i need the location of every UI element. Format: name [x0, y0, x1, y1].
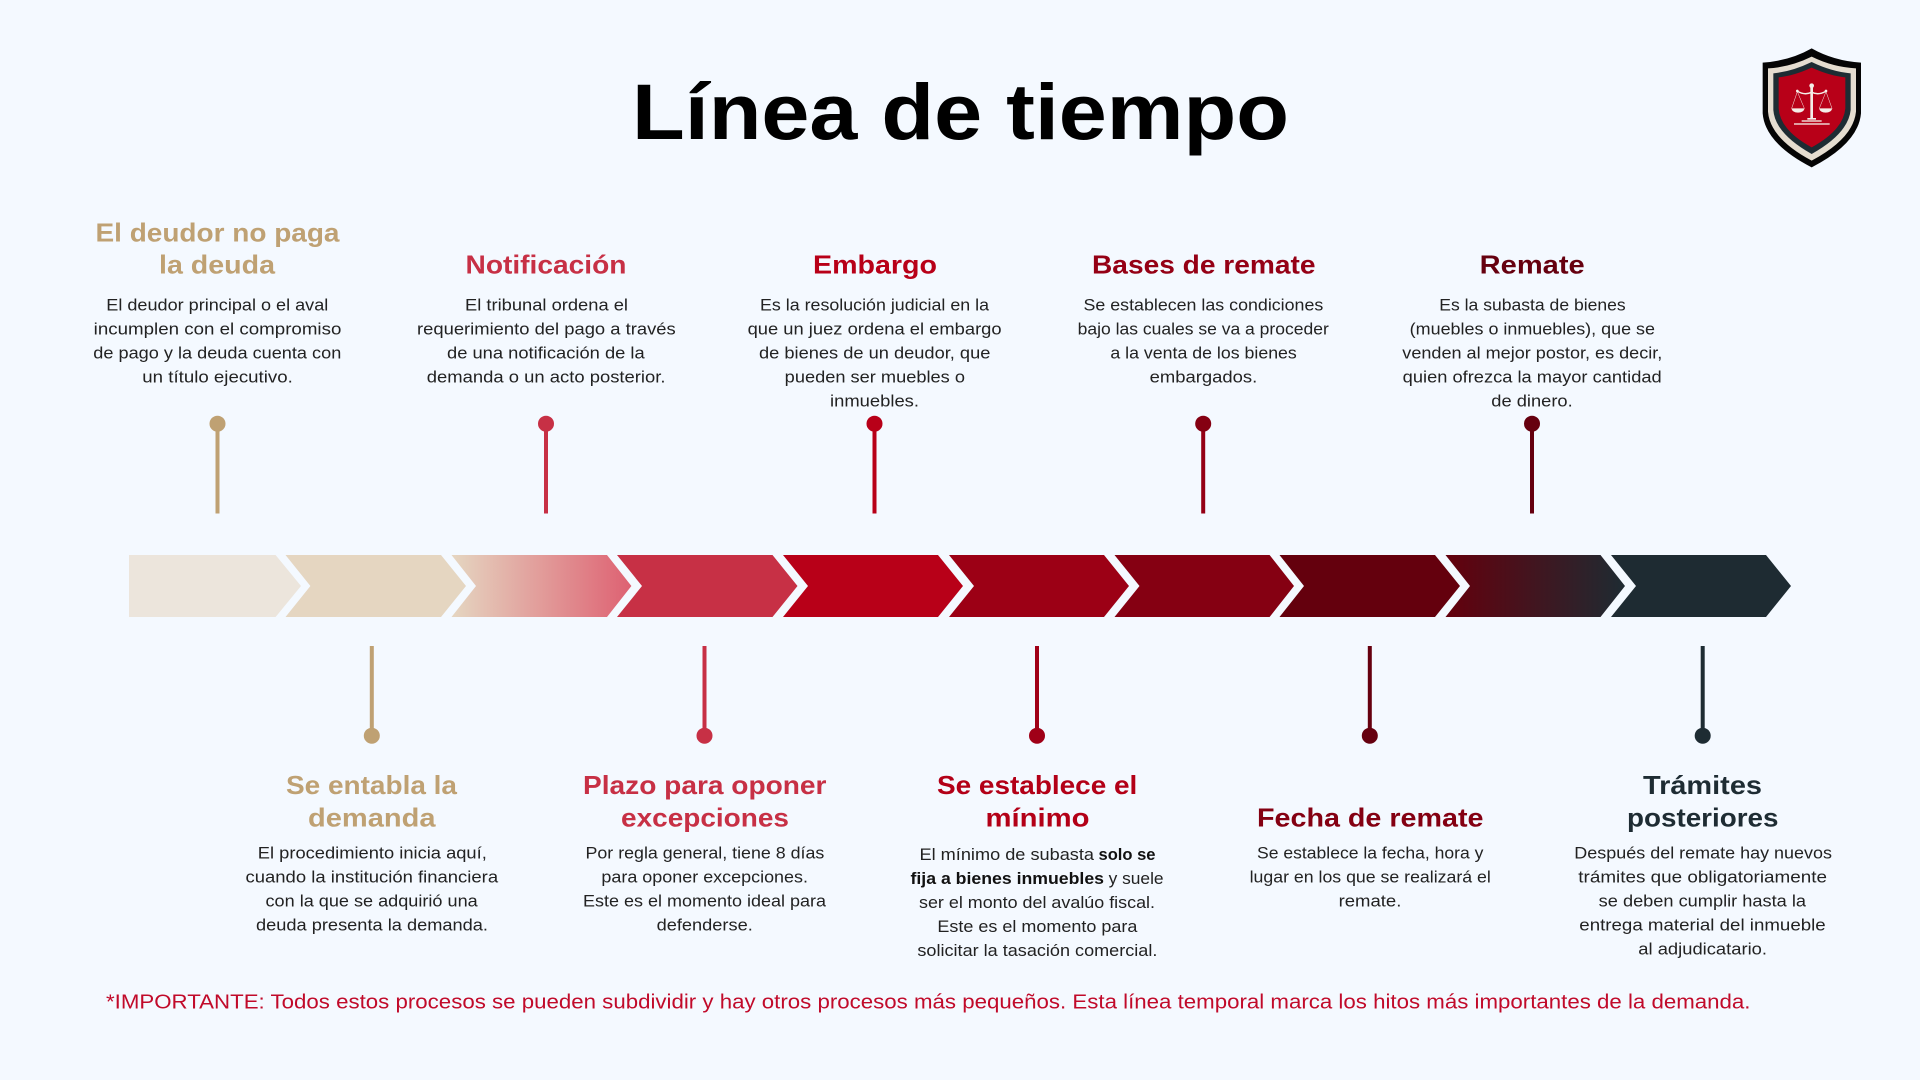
text block: entrega material del inmueble [1579, 915, 1826, 934]
pin [1362, 646, 1378, 744]
panel: Plazo para oponer excepciones [583, 646, 827, 934]
heading: Plazo para oponer [583, 770, 826, 800]
heading: Fecha de remate [1257, 803, 1484, 833]
pin [1195, 416, 1211, 514]
text block: con la que se adquirió una [266, 891, 478, 910]
text block: un título ejecutivo. [142, 368, 293, 387]
title: Línea de tiempo [632, 68, 1289, 156]
text block: inmuebles. [830, 392, 919, 411]
text block: Se establece la fecha, hora y [1257, 843, 1484, 862]
text block: solo se [1098, 845, 1156, 864]
text block: trámites que obligatoriamente [1578, 867, 1827, 886]
text block [1402, 296, 1662, 411]
text block [910, 845, 1164, 960]
text block [748, 296, 1002, 411]
text block: deuda presenta la demanda. [256, 915, 488, 934]
panel: Trámites posteriores [1574, 646, 1832, 958]
text block: Este es el momento ideal para [583, 891, 827, 910]
text block: El procedimiento inicia aquí, [258, 843, 487, 862]
text block: de una notificación de la [447, 344, 645, 363]
text block: cuando la institución financiera [246, 867, 499, 886]
heading [96, 218, 340, 279]
panel: Fecha de remate [1250, 646, 1491, 910]
text block: pueden ser muebles o [785, 368, 965, 387]
text block: venden al mejor postor, es decir, [1402, 344, 1662, 363]
heading [583, 770, 826, 833]
text block [246, 843, 499, 934]
text block: (muebles o inmuebles), que se [1410, 320, 1655, 339]
text block: Es la subasta de bienes [1439, 296, 1626, 315]
heading: demanda [308, 803, 436, 833]
text block: de dinero. [1491, 392, 1573, 411]
text block: demanda o un acto posterior. [427, 368, 666, 387]
text block: Después del remate hay nuevos [1574, 843, 1832, 862]
heading: Remate [1480, 249, 1585, 279]
text block [1574, 843, 1832, 958]
text block: El mínimo de subasta [920, 845, 1095, 864]
pin [866, 416, 882, 514]
text block: defenderse. [657, 915, 753, 934]
text block: El deudor principal o el aval [106, 296, 328, 315]
heading [937, 770, 1137, 833]
text block: de bienes de un deudor, que [759, 344, 990, 363]
pin [696, 646, 712, 744]
text block: para oponer excepciones. [601, 867, 808, 886]
text block: Es la resolución judicial en la [760, 296, 990, 315]
panel: Notificación [417, 249, 676, 514]
pin [210, 416, 226, 514]
heading: Notificación [466, 249, 626, 279]
pin [538, 416, 554, 514]
heading: posteriores [1627, 803, 1778, 833]
text block [417, 296, 676, 387]
heading: excepciones [621, 803, 789, 833]
text block: solicitar la tasación comercial. [917, 941, 1157, 960]
text block: requerimiento del pago a través [417, 320, 676, 339]
text block: Se establecen las condiciones [1084, 296, 1323, 315]
heading [286, 770, 458, 833]
heading: mínimo [986, 803, 1090, 833]
text block: Por regla general, tiene 8 días [586, 843, 824, 862]
text block: y suele [1109, 869, 1164, 888]
text block [1078, 296, 1329, 387]
pin [1524, 416, 1540, 514]
heading: Bases de remate [1092, 249, 1316, 279]
heading: Trámites [1643, 770, 1762, 800]
text block: El tribunal ordena el [465, 296, 628, 315]
heading: Se entabla la [286, 770, 458, 800]
text block: incumplen con el compromiso [94, 320, 341, 339]
text block: embargados. [1150, 368, 1257, 387]
panel: Bases de remate [1078, 249, 1329, 514]
heading: Embargo [813, 249, 937, 279]
text block [583, 843, 827, 934]
panel: Se entabla la demanda [246, 646, 499, 934]
text block: a la venta de los bienes [1110, 344, 1297, 363]
panel: Embargo [748, 249, 1002, 514]
text block: Este es el momento para [937, 917, 1138, 936]
panel: Remate [1402, 249, 1662, 514]
panel: Se establece el mínimo [910, 646, 1164, 960]
text block: bajo las cuales se va a proceder [1078, 320, 1329, 339]
pin [1029, 646, 1045, 744]
text block: que un juez ordena el embargo [748, 320, 1002, 339]
heading [1627, 770, 1778, 833]
panel: El deudor no paga la deuda [93, 218, 341, 513]
footnote: *IMPORTANTE: Todos estos procesos se pueden subdividir y hay otros procesos más pequeños. Esta línea temporal marca los hitos más importantes de la demanda. [106, 990, 1750, 1013]
heading: la deuda [159, 249, 276, 279]
pin [1695, 646, 1711, 744]
arrow timeline [129, 555, 1791, 617]
pin [364, 646, 380, 744]
icon: shield logo with scales of justice [1763, 48, 1861, 167]
text block: se deben cumplir hasta la [1599, 891, 1807, 910]
text block: al adjudicatario. [1638, 939, 1767, 958]
heading: El deudor no paga [96, 218, 340, 248]
text block: de pago y la deuda cuenta con [93, 344, 341, 363]
text block: fija a bienes inmuebles [910, 869, 1104, 888]
heading: Se establece el [937, 770, 1137, 800]
text block: quien ofrezca la mayor cantidad [1403, 368, 1662, 387]
text block [1250, 843, 1491, 910]
text block: remate. [1339, 891, 1401, 910]
text block [93, 296, 341, 387]
text block: lugar en los que se realizará el [1250, 867, 1491, 886]
text block: ser el monto del avalúo fiscal. [919, 893, 1155, 912]
